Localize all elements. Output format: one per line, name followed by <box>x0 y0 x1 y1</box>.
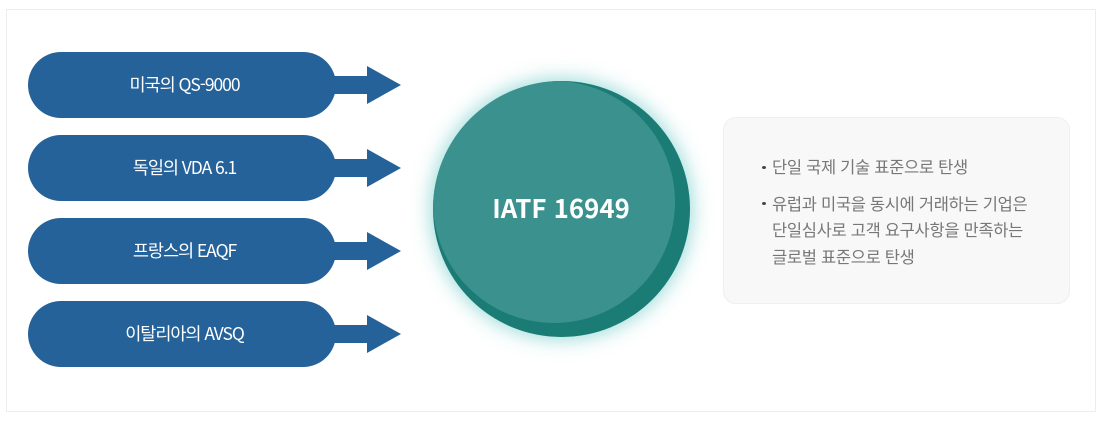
pill: Italy AVSQ <box>28 301 336 366</box>
flow item: Germany VDA 6.1 <box>28 135 401 201</box>
pill: Germany VDA 6.1: 독일의 VDA 6.1 <box>133 155 236 180</box>
flow item: USA QS-9000 <box>28 52 401 118</box>
bullet one text: 단일 국제 기술 표준으로 탄생 <box>772 154 968 178</box>
pill: USA QS-9000 <box>28 52 336 118</box>
flow item: France EAQF <box>28 218 401 284</box>
bullet two text: 단일심사로 고객 요구사항을 만족하는 <box>772 217 1023 241</box>
pill: Germany VDA 6.1 <box>28 135 336 200</box>
pill: Italy AVSQ: 이탈리아의 AVSQ <box>125 321 244 346</box>
panel: description <box>723 117 1070 304</box>
arrow: USA to IATF <box>334 66 401 104</box>
arrow: Italy to IATF <box>334 315 401 353</box>
pill: USA QS-9000: 미국의 QS-9000 <box>129 72 240 97</box>
pill: France EAQF: 프랑스의 EAQF <box>133 238 236 263</box>
arrow: France to IATF <box>334 232 401 270</box>
bullet two text: 유럽과 미국을 동시에 거래하는 기업은 <box>772 190 1027 214</box>
flow item: Italy AVSQ <box>28 301 401 367</box>
bullet two marker <box>762 202 766 205</box>
circle highlight <box>433 81 675 323</box>
bullet two text <box>772 190 1027 268</box>
central circle <box>433 81 690 337</box>
arrow: Germany to IATF <box>334 149 401 187</box>
pill: France EAQF <box>28 218 336 284</box>
bullet one marker <box>762 166 766 169</box>
circle title: IATF 16949 <box>492 189 630 226</box>
bullet two text: 글로벌 표준으로 탄생 <box>772 244 915 268</box>
